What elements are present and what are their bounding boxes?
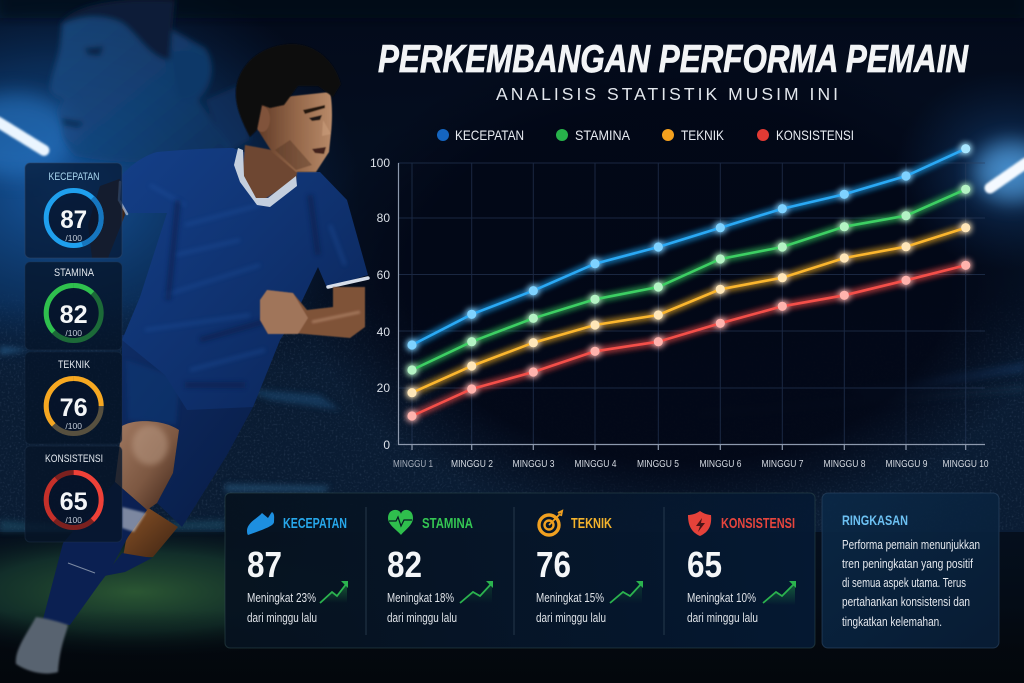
- series: stamina: [407, 185, 970, 375]
- x axis labels: MINGGU 3: [512, 458, 555, 470]
- y axis labels: 40: [377, 325, 390, 339]
- shorts: [122, 320, 285, 527]
- stat: kecepatan: Meningkat 23%: [247, 591, 316, 605]
- stat: konsistensi: Meningkat 10%: [687, 591, 756, 605]
- y axis labels: 100: [370, 156, 390, 170]
- trend arrow: [763, 581, 796, 605]
- panel: ringkasan summary: tren peningkatan yang positif: [842, 557, 973, 571]
- y axis labels: 0: [383, 438, 390, 452]
- gauge card: konsistensi: KONSISTENSI: [45, 453, 103, 465]
- trend arrow: [320, 581, 348, 603]
- front thigh: [115, 421, 179, 510]
- x axis labels: MINGGU 8: [824, 458, 866, 470]
- x axis labels: MINGGU 10: [942, 458, 989, 470]
- stat: teknik: TEKNIK: [571, 515, 612, 532]
- series: teknik: [407, 223, 970, 397]
- x axis labels: MINGGU 9: [886, 458, 928, 470]
- series: konsistensi: [407, 261, 970, 421]
- collar: [234, 148, 297, 207]
- line chart: [370, 144, 989, 470]
- x axis labels: MINGGU 7: [762, 458, 804, 470]
- stat: stamina: STAMINA: [422, 515, 473, 532]
- rear calf and sock: [104, 507, 178, 576]
- x axis labels: [393, 458, 989, 470]
- stat: teknik: 76: [536, 544, 571, 585]
- panel: ringkasan summary: RINGKASAN: [842, 512, 908, 528]
- gauge card: konsistensi: /100: [65, 515, 82, 525]
- icon: running shoe: [247, 512, 274, 535]
- x axis labels: MINGGU 6: [700, 458, 742, 470]
- chart axes: [398, 163, 985, 450]
- stat: kecepatan: 87: [247, 544, 282, 585]
- panel: ringkasan summary: Performa pemain menunjukkan: [842, 538, 980, 552]
- hair: [236, 44, 341, 137]
- chart legend: TEKNIK: [681, 127, 725, 143]
- gauge card: kecepatan: KECEPATAN: [48, 171, 100, 183]
- x axis labels: MINGGU 5: [637, 458, 679, 470]
- icon: target: [539, 511, 562, 535]
- stat: stamina: [387, 510, 493, 625]
- panel: metric stats: [225, 493, 815, 648]
- gauge card: stamina: STAMINA: [54, 267, 95, 279]
- chart legend: KECEPATAN: [455, 127, 524, 143]
- gauge card: kecepatan: [25, 163, 122, 258]
- neck: [242, 145, 298, 203]
- stat: teknik: dari minggu lalu: [536, 611, 606, 625]
- gauge card: kecepatan: /100: [65, 233, 82, 243]
- x axis labels: MINGGU 4: [574, 458, 617, 470]
- player figure: [16, 44, 368, 674]
- stat: teknik: Meningkat 15%: [536, 591, 604, 605]
- gauge card: kecepatan: 87: [60, 206, 87, 234]
- stat: konsistensi: dari minggu lalu: [687, 611, 758, 625]
- y axis labels: 20: [377, 381, 390, 395]
- subtitle: ANALISIS STATISTIK MUSIM INI: [496, 84, 838, 104]
- stat: kecepatan: [247, 512, 348, 625]
- trend arrow: [610, 581, 643, 603]
- gauge card: teknik: /100: [65, 421, 82, 431]
- y axis labels: [370, 156, 390, 452]
- chart legend: [437, 127, 854, 143]
- y axis labels: 60: [377, 268, 390, 282]
- ghost portrait of the player: [50, 0, 250, 162]
- chart legend: STAMINA: [575, 127, 631, 143]
- icon: shield: [688, 511, 711, 536]
- y axis labels: 80: [377, 211, 390, 225]
- panel: ringkasan summary: pertahankan konsistensi dan: [842, 595, 970, 609]
- stat: konsistensi: KONSISTENSI: [721, 515, 795, 532]
- jersey: [118, 148, 368, 410]
- forearm and hand: [260, 287, 365, 338]
- panel: left score gauges: [25, 163, 122, 542]
- x axis labels: MINGGU 2: [451, 458, 493, 470]
- panel: ringkasan summary: tingkatkan kelemahan.: [842, 615, 942, 629]
- stadium floodlight left: [0, 93, 75, 177]
- stadium floodlight right: [895, 70, 1024, 270]
- gauge card: stamina: [25, 262, 122, 350]
- chart legend: KONSISTENSI: [776, 127, 854, 143]
- face: [254, 92, 332, 172]
- icon: heart with pulse: [388, 510, 413, 535]
- stat: kecepatan: dari minggu lalu: [247, 611, 317, 625]
- front sock and tape: [42, 482, 147, 625]
- stat: kecepatan: KECEPATAN: [283, 515, 347, 532]
- gauge card: konsistensi: 65: [60, 488, 88, 516]
- panel: ringkasan summary: [822, 493, 999, 648]
- rear arm: [88, 178, 125, 258]
- boot: [16, 617, 68, 674]
- panel: ringkasan summary: di semua aspek utama. Terus: [842, 576, 966, 590]
- stat: konsistensi: [687, 511, 796, 625]
- jersey trim: [119, 182, 368, 287]
- gauge card: stamina: /100: [65, 328, 82, 338]
- stat: konsistensi: 65: [687, 544, 722, 585]
- x axis labels: MINGGU 1: [393, 458, 433, 470]
- stat: stamina: Meningkat 18%: [387, 591, 454, 605]
- stat: stamina: 82: [387, 544, 422, 585]
- gauge card: teknik: [25, 352, 122, 444]
- gauge card: stamina: 82: [60, 301, 88, 329]
- stat: stamina: dari minggu lalu: [387, 611, 457, 625]
- stat: teknik: [536, 511, 643, 625]
- chart grid: [398, 163, 985, 444]
- trend arrow: [460, 581, 493, 603]
- gauge card: teknik: TEKNIK: [58, 359, 91, 371]
- series: kecepatan: [407, 144, 970, 350]
- gauge card: teknik: 76: [60, 394, 88, 422]
- gauge card: konsistensi: [25, 446, 122, 542]
